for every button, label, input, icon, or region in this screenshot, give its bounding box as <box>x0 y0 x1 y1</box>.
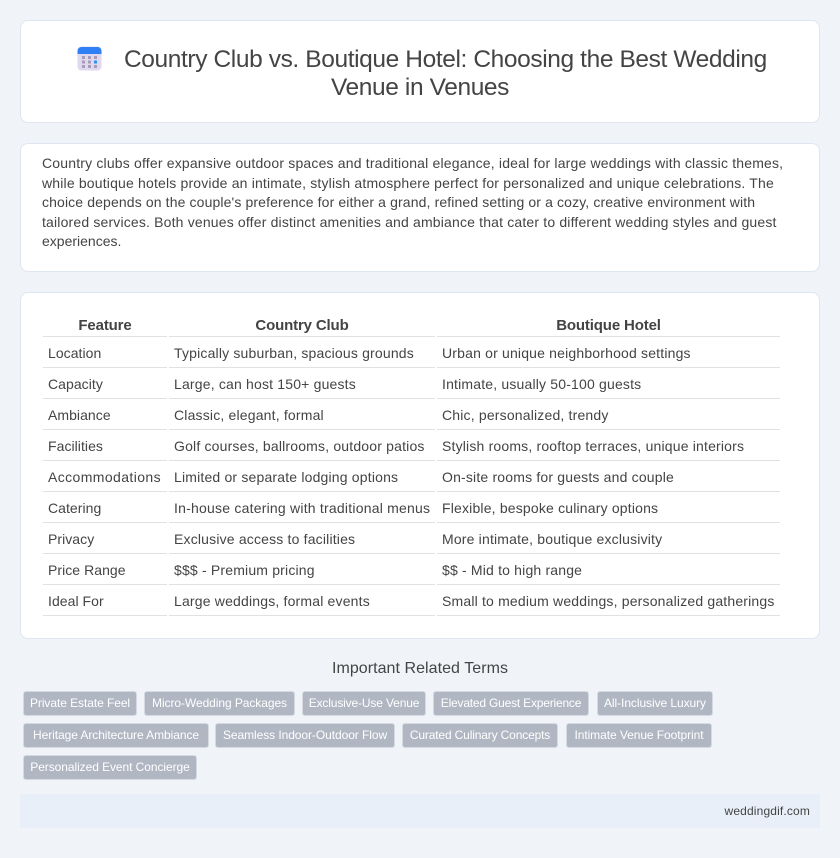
row: Capacity <box>48 376 641 392</box>
related terms heading: Important Related Terms <box>332 660 508 677</box>
text: Limited or separate lodging options <box>174 469 398 485</box>
text: Capacity <box>48 376 103 392</box>
title: Venue in Venues <box>331 74 509 101</box>
tags: Seamless Indoor-Outdoor Flow <box>223 728 387 742</box>
text: Small to medium weddings, personalized gatherings <box>442 593 775 609</box>
row: Accommodations <box>48 469 674 485</box>
text: Chic, personalized, trendy <box>442 407 609 423</box>
tags: Exclusive-Use Venue <box>309 696 419 710</box>
intro card <box>20 143 820 272</box>
row: Price Range <box>48 562 582 578</box>
row: Ambiance <box>48 407 609 423</box>
text: Price Range <box>48 562 126 578</box>
text: Large weddings, formal events <box>174 593 370 609</box>
row: Privacy <box>48 531 662 547</box>
table card <box>20 292 820 639</box>
tags: Private Estate Feel <box>30 696 130 710</box>
tags: Intimate Venue Footprint <box>574 728 704 742</box>
tags: Micro-Wedding Packages <box>152 696 287 710</box>
intro text <box>42 155 783 249</box>
row: Location <box>48 345 691 361</box>
tags: Personalized Event Concierge <box>30 760 190 774</box>
text: Location <box>48 345 101 361</box>
header card <box>20 20 820 123</box>
text: Large, can host 150+ guests <box>174 376 356 392</box>
tags: Elevated Guest Experience <box>441 696 581 710</box>
icon: calendar <box>78 46 102 70</box>
text: More intimate, boutique exclusivity <box>442 531 662 547</box>
text: Flexible, bespoke culinary options <box>442 500 658 516</box>
text: Ambiance <box>48 407 111 423</box>
header: Boutique Hotel: Boutique Hotel <box>556 317 661 334</box>
title: Country Club vs. Boutique Hotel: Choosing the Best Wedding <box>124 46 767 73</box>
intro text: tailored services. Both venues offer distinct amenities and ambiance that cater to different wedding styles and guest <box>42 214 777 230</box>
intro text: while boutique hotels provide an intimate, stylish atmosphere perfect for personalized and unique celebrations. The <box>42 175 774 191</box>
header: Country Club: Country Club <box>255 317 349 334</box>
header: Feature: Feature <box>78 317 132 334</box>
tags <box>23 691 713 780</box>
intro text: experiences. <box>42 233 121 249</box>
text: $$$ - Premium pricing <box>174 562 315 578</box>
text: In-house catering with traditional menus <box>174 500 430 516</box>
text: Privacy <box>48 531 94 547</box>
text: Ideal For <box>48 593 104 609</box>
text: Accommodations <box>48 469 161 485</box>
text: Facilities <box>48 438 103 454</box>
tags: Heritage Architecture Ambiance <box>33 728 199 742</box>
footer text: weddingdif.com <box>725 804 810 818</box>
text: Urban or unique neighborhood settings <box>442 345 691 361</box>
row: Catering <box>48 500 658 516</box>
row: Facilities <box>48 438 744 454</box>
intro text: Country clubs offer expansive outdoor spaces and traditional elegance, ideal for large weddings with classic themes, <box>42 155 783 171</box>
text: $$ - Mid to high range <box>442 562 582 578</box>
text: Stylish rooms, rooftop terraces, unique interiors <box>442 438 744 454</box>
intro text: choice depends on the couple's preference for either a grand, refined setting or a cozy, creative environment with <box>42 194 755 210</box>
tags: Curated Culinary Concepts <box>410 728 550 742</box>
text: Exclusive access to facilities <box>174 531 355 547</box>
footer bar <box>20 794 820 828</box>
text: Catering <box>48 500 101 516</box>
text: Golf courses, ballrooms, outdoor patios <box>174 438 425 454</box>
row: Ideal For <box>48 593 775 609</box>
text: Classic, elegant, formal <box>174 407 324 423</box>
tags: All-Inclusive Luxury <box>604 696 706 710</box>
text: Intimate, usually 50-100 guests <box>442 376 641 392</box>
title <box>124 46 767 101</box>
text: Typically suburban, spacious grounds <box>174 345 414 361</box>
text: On-site rooms for guests and couple <box>442 469 674 485</box>
